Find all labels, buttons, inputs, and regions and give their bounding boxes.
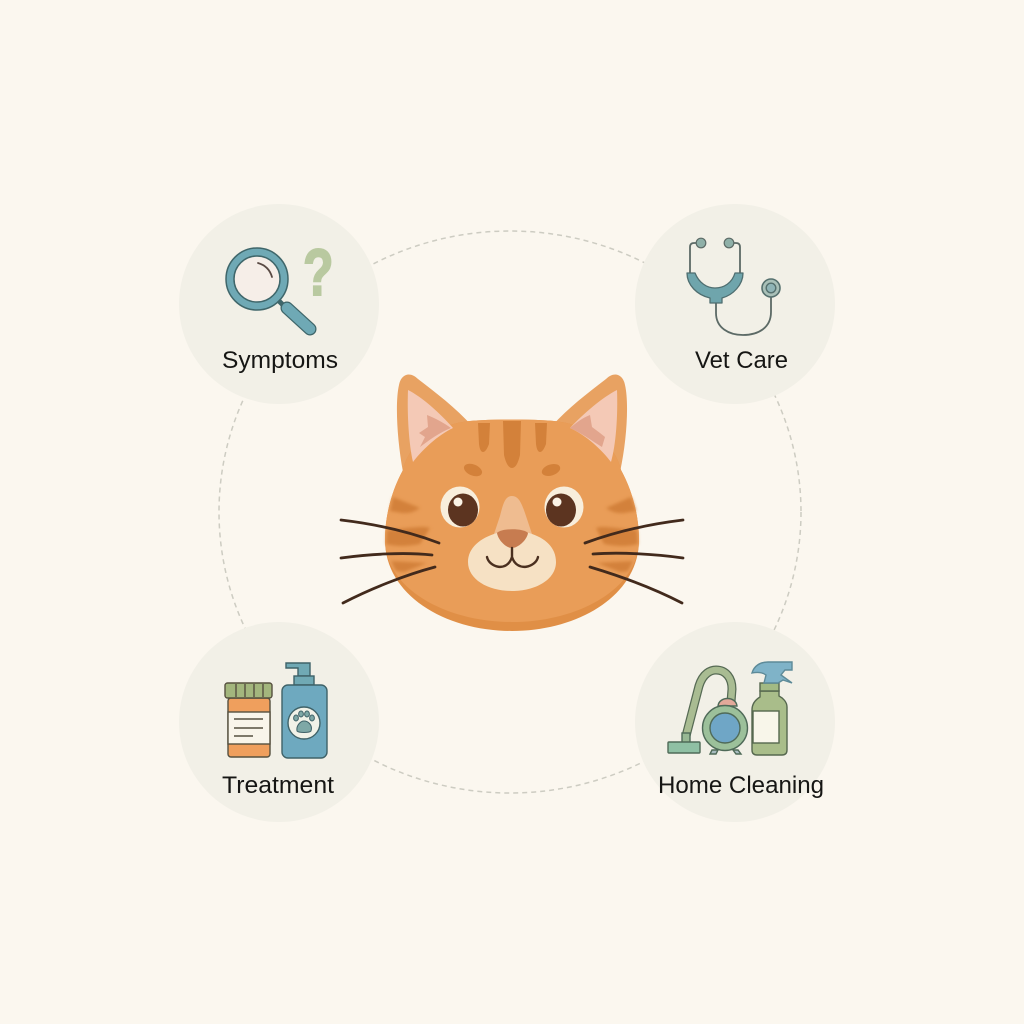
left ear <box>397 374 472 472</box>
icon: vacuum cleaner <box>668 670 748 754</box>
head <box>385 420 639 631</box>
icon: magnifying glass <box>230 252 310 329</box>
icon: question mark: ? <box>303 236 334 310</box>
label: home cleaning: Home Cleaning <box>658 772 824 799</box>
mouth <box>487 548 538 567</box>
illustration: cat face <box>341 374 683 631</box>
icon: shampoo bottle with paw <box>282 663 327 758</box>
forehead stripes <box>462 421 562 479</box>
head light area <box>385 420 639 622</box>
icon: stethoscope <box>687 238 780 335</box>
whiskers <box>341 520 683 603</box>
icon: spray bottle <box>752 662 792 755</box>
right eye <box>544 486 584 528</box>
left inner ear <box>408 390 453 462</box>
label: symptoms: Symptoms <box>222 347 338 374</box>
nose <box>497 529 528 548</box>
cheek stripes <box>386 497 638 572</box>
label: vet care: Vet Care <box>695 347 788 374</box>
dashed ring connecting topics <box>219 231 801 793</box>
nose bridge <box>494 496 532 534</box>
panel: symptoms <box>179 204 379 404</box>
left eye <box>440 486 480 528</box>
muzzle <box>468 531 556 591</box>
panel: home cleaning <box>635 622 835 822</box>
right ear <box>552 374 627 472</box>
label: treatment: Treatment <box>222 772 334 799</box>
right inner ear <box>570 390 617 462</box>
icon: medicine jar <box>225 683 272 757</box>
panel: vet care <box>635 204 835 404</box>
panel: treatment <box>179 622 379 822</box>
